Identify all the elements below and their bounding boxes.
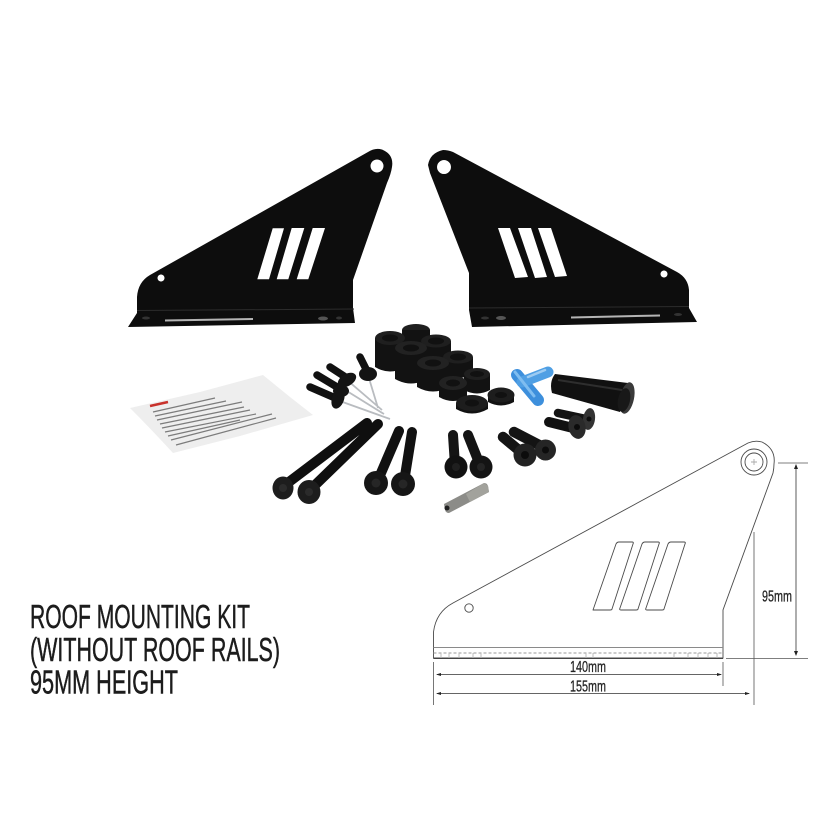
technical drawing of bracket [434,441,774,658]
right black bracket [428,150,697,327]
title text [30,598,280,700]
flange lines [434,648,723,658]
rubber spacers [375,324,514,414]
outlined slots [593,542,685,610]
left black bracket [128,149,392,327]
instruction sheet [130,375,313,453]
short countersunk screws [549,407,596,441]
title text: 95MM HEIGHT [30,664,178,700]
longest screws pair [272,423,378,504]
bracket outline [434,441,774,658]
torx bit [444,483,489,513]
dimension lines [434,463,808,705]
medium screws pair [503,432,556,466]
blue wire connectors [515,370,548,400]
pivot hole [741,449,767,475]
rivets [310,357,390,419]
small hole [465,604,473,612]
title text: (WITHOUT ROOF RAILS) [30,631,280,668]
title text: ROOF MOUNTING KIT [30,598,250,635]
dimension label: 155mm: 155mm [570,678,606,696]
dimension label: 140mm: 140mm [570,659,606,676]
short screws pair [444,435,492,478]
long screws pair [364,431,415,496]
dimension label: 95mm: 95mm [762,588,792,606]
large black sleeve [551,374,637,415]
